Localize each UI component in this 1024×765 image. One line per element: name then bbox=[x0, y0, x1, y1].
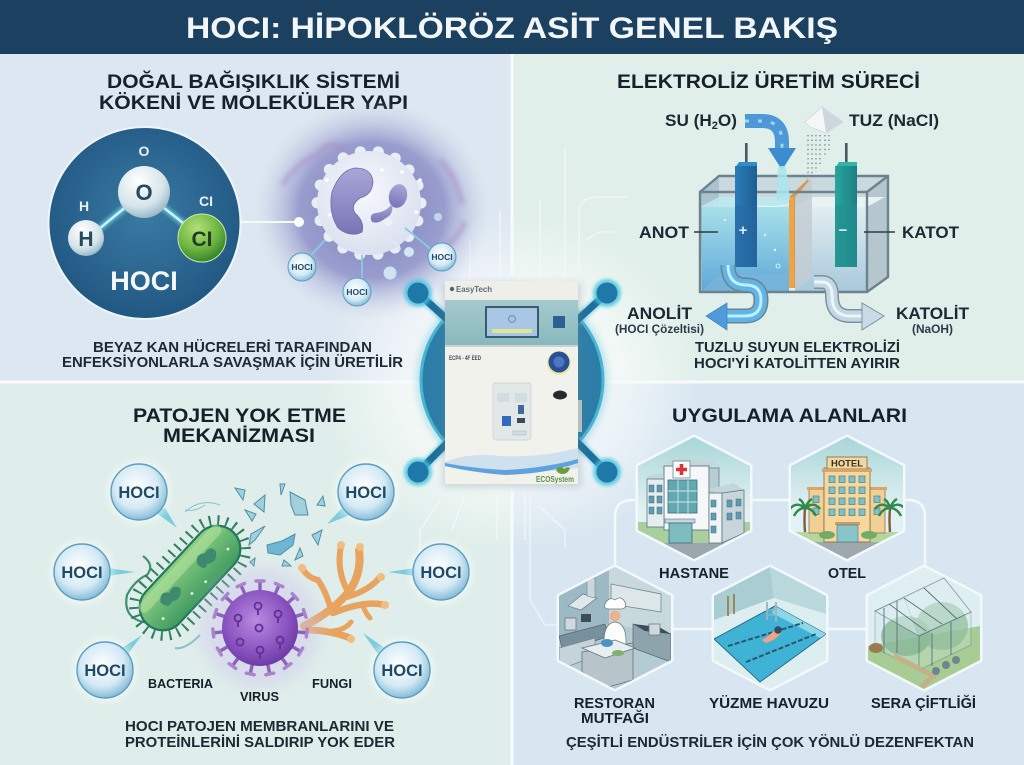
molecule diagram: H bbox=[78, 228, 94, 251]
molecule diagram: O bbox=[139, 143, 150, 159]
hexagon: restaurant kitchen bbox=[559, 567, 671, 689]
water inflow arrow bbox=[745, 121, 796, 200]
HOCl bubble: middle right: HOCI bbox=[420, 564, 462, 582]
small HOCl bubbles: HOCI bbox=[346, 287, 368, 297]
application labels: MUTFAĞI bbox=[581, 709, 649, 727]
label: catholyte bbox=[896, 304, 970, 336]
caption: immunity: ENFEKSİYONLARLA SAVAŞMAK İÇİN ÜRETİLİR bbox=[62, 354, 403, 371]
panel: electrolysis bbox=[615, 72, 970, 372]
electrodes bbox=[735, 143, 857, 267]
device cabinet: ECP4 - 4F EED bbox=[449, 355, 481, 362]
heading: pathogen: PATOJEN YOK ETME bbox=[133, 406, 346, 427]
caption: electrolysis: TUZLU SUYUN ELEKTROLİZİ bbox=[695, 339, 900, 356]
panel: pathogen destruction bbox=[51, 406, 472, 751]
HOCl bubble: lower left bbox=[74, 635, 142, 701]
hexagon: hotel: HOTEL bbox=[831, 458, 863, 470]
label: cathode: KATOT bbox=[902, 223, 960, 242]
caption: applications: ÇEŞİTLİ ENDÜSTRİLER İÇİN ÇOK YÖNLÜ DEZENFEKTAN bbox=[566, 734, 974, 751]
small HOCl bubbles: HOCI bbox=[291, 262, 313, 272]
application labels bbox=[574, 566, 976, 727]
pathogen labels bbox=[148, 676, 352, 704]
bacteria bbox=[122, 508, 258, 648]
heading: pathogen: MEKANİZMASI bbox=[163, 426, 315, 447]
heading: pathogen bbox=[133, 406, 346, 447]
fungi bbox=[298, 541, 389, 643]
connector line bbox=[240, 217, 304, 227]
virus bbox=[200, 568, 320, 688]
label: water and salt: O) bbox=[718, 111, 737, 130]
hexagon: greenhouse bbox=[868, 567, 980, 689]
pathogen labels: FUNGI bbox=[312, 676, 352, 691]
HOCl bubble: upper right bbox=[327, 461, 397, 524]
label: anolyte: (HOCI Çözeltisi) bbox=[615, 322, 704, 336]
application labels: HASTANE bbox=[659, 566, 729, 582]
arrow: anolyte outlet bbox=[706, 265, 761, 330]
caption: immunity: BEYAZ KAN HÜCRELERİ TARAFINDAN bbox=[93, 339, 372, 356]
molecule diagram: O bbox=[135, 180, 153, 205]
heading: electrolysis: ELEKTROLİZ ÜRETİM SÜRECİ bbox=[617, 72, 920, 93]
caption: pathogen: PROTEİNLERİNİ SALDIRIP YOK EDER bbox=[125, 734, 395, 751]
HOCl bubble: lower left: HOCI bbox=[84, 662, 126, 680]
shard fragments bbox=[175, 484, 325, 648]
HOCl bubble: upper right: HOCI bbox=[345, 484, 387, 502]
HOCl bubble: middle right bbox=[388, 541, 472, 603]
pathogen labels: BACTERIA bbox=[148, 676, 214, 691]
pathogen labels: VIRUS bbox=[240, 689, 279, 704]
heading: applications: UYGULAMA ALANLARI bbox=[672, 406, 907, 427]
title bar bbox=[0, 0, 1024, 54]
hexagon: hospital bbox=[638, 437, 750, 559]
application labels: OTEL bbox=[828, 566, 866, 582]
caption: immunity bbox=[62, 339, 403, 371]
HOCl bubble: upper left: HOCI bbox=[118, 484, 160, 502]
caption: pathogen bbox=[125, 718, 395, 751]
heading: immunity: KÖKENİ VE MOLEKÜLER YAPI bbox=[99, 93, 408, 114]
label: anolyte: ANOLİT bbox=[627, 304, 693, 323]
HOCl bubble: lower right bbox=[363, 633, 433, 701]
molecule diagram: CI bbox=[192, 228, 212, 251]
arrow: catholyte outlet bbox=[814, 282, 884, 330]
white blood cell bbox=[254, 100, 490, 320]
label: cathode bbox=[864, 223, 960, 242]
label: catholyte: KATOLİT bbox=[896, 304, 970, 323]
caption: electrolysis bbox=[694, 339, 900, 372]
HOCl bubble: middle left bbox=[51, 541, 135, 603]
label: anode bbox=[639, 223, 718, 242]
panel: natural immunity origin bbox=[48, 71, 490, 371]
molecule diagram bbox=[48, 126, 242, 320]
label: anolyte bbox=[615, 304, 704, 336]
device cabinet bbox=[443, 281, 582, 487]
label: water and salt: 2 bbox=[712, 120, 718, 132]
device cabinet: ECOSystem bbox=[536, 475, 574, 484]
central hub: HOCl generator device bbox=[404, 279, 621, 487]
electrodes: − bbox=[839, 222, 848, 239]
heading: immunity: DOĞAL BAĞIŞIKLIK SİSTEMİ bbox=[107, 71, 400, 93]
device cabinet: EasyTech bbox=[456, 285, 492, 294]
small HOCl bubbles bbox=[288, 243, 456, 306]
HOCl bubble: middle left: HOCI bbox=[61, 564, 103, 582]
hub circle and arms bbox=[404, 279, 621, 486]
label: water and salt: TUZ (NaCl) bbox=[849, 111, 939, 130]
molecule diagram: HOCI bbox=[110, 266, 178, 296]
HOCl bubble: lower right: HOCI bbox=[381, 662, 423, 680]
label: water and salt bbox=[665, 111, 939, 132]
panel: application areas bbox=[559, 406, 980, 751]
hexagon: swimming pool bbox=[714, 567, 826, 689]
connector lines bbox=[615, 500, 925, 629]
salt pile bbox=[805, 107, 843, 178]
application labels: SERA ÇİFTLİĞİ bbox=[871, 694, 976, 712]
application labels: YÜZME HAVUZU bbox=[709, 695, 829, 712]
electrolysis tank bbox=[700, 176, 888, 292]
application labels: RESTORAN bbox=[574, 696, 655, 712]
title bar: HOCI: HİPOKLÖRÖZ ASİT GENEL BAKIŞ bbox=[186, 12, 838, 45]
caption: electrolysis: HOCI'Yİ KATOLİTTEN AYIRIR bbox=[694, 355, 900, 372]
heading: immunity bbox=[99, 71, 408, 114]
electrodes: + bbox=[739, 222, 748, 239]
touch screen bbox=[485, 306, 539, 338]
HOCl bubble: upper left bbox=[108, 461, 177, 528]
caption: pathogen: HOCI PATOJEN MEMBRANLARINI VE bbox=[125, 718, 394, 735]
molecule diagram: H bbox=[79, 198, 89, 214]
hexagon: hotel bbox=[790, 437, 905, 562]
label: water and salt: SU (H bbox=[665, 111, 711, 130]
label: anode: ANOT bbox=[639, 223, 690, 242]
label: catholyte: (NaOH) bbox=[912, 322, 953, 336]
small HOCl bubbles: HOCI bbox=[431, 252, 453, 262]
molecule diagram: CI bbox=[199, 193, 213, 209]
